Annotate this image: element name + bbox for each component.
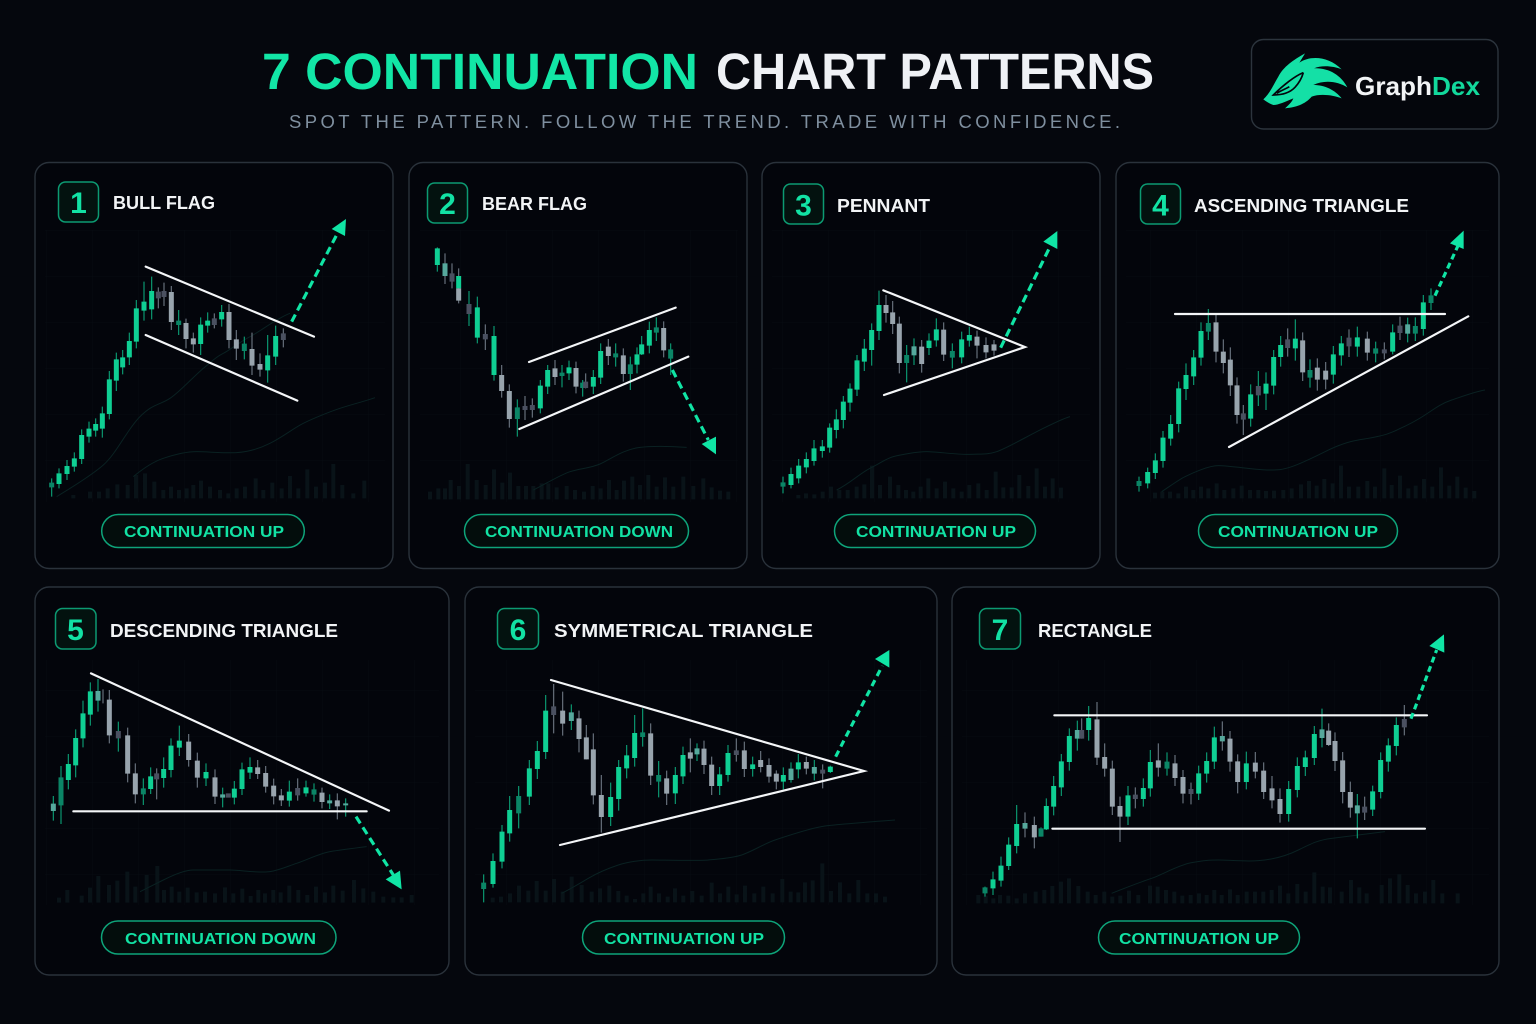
badge: 3 — [784, 184, 824, 224]
heading: bull flag: BULL FLAG — [113, 193, 215, 213]
chart: rectangle candles — [978, 634, 1458, 903]
heading: descending triangle: DESCENDING TRIANGLE — [110, 621, 338, 641]
arrow: up breakout — [1411, 634, 1444, 719]
pill: continuation up: CONTINUATION UP — [124, 524, 284, 541]
panel: 2 bear flag — [409, 162, 747, 568]
badge: 2 — [428, 183, 468, 223]
logo: GraphDex: Dex — [1432, 71, 1481, 101]
arrow: down breakout — [356, 817, 402, 889]
pill: continuation up: CONTINUATION UP — [856, 524, 1016, 541]
heading: symmetrical triangle: SYMMETRICAL TRIANGLE — [554, 621, 813, 641]
logo: GraphDex — [1252, 40, 1498, 129]
pill: continuation down: CONTINUATION DOWN — [125, 931, 316, 948]
panel: 5 descending triangle — [35, 587, 449, 975]
badge: 2: 2 — [439, 188, 456, 221]
heading: bear flag: BEAR FLAG — [482, 194, 587, 214]
pill: continuation up — [582, 921, 784, 954]
logo: GraphDex: Graph — [1355, 71, 1432, 101]
pill: continuation down — [102, 921, 336, 954]
badge: 1: 1 — [70, 187, 87, 220]
arrow: up breakout — [836, 650, 889, 757]
arrow: down breakout — [672, 370, 716, 454]
badge: 5: 5 — [67, 614, 84, 647]
pill: continuation up: CONTINUATION UP — [604, 931, 764, 948]
panel: 3 pennant — [762, 162, 1100, 568]
badge: 5 — [56, 608, 96, 649]
badge: 4 — [1140, 184, 1180, 224]
chart: symmetrical triangle candles — [484, 650, 895, 902]
subtitle: SPOT THE PATTERN. FOLLOW THE TREND. TRADE WITH CONFIDENCE. — [289, 111, 1120, 132]
pill: continuation up: CONTINUATION UP — [1218, 524, 1378, 541]
arrow: up breakout — [1001, 231, 1057, 348]
pill: continuation up — [834, 514, 1036, 548]
title — [262, 43, 1154, 100]
heading: ascending triangle: ASCENDING TRIANGLE — [1194, 196, 1409, 216]
title: 7 CONTINUATION — [262, 43, 698, 100]
icon: GraphDex flame head — [1263, 53, 1347, 108]
chart: descending triangle candles — [53, 673, 412, 903]
badge: 6: 6 — [510, 614, 526, 647]
badge: 3: 3 — [795, 190, 812, 222]
heading: rectangle: RECTANGLE — [1038, 621, 1152, 641]
badge: 7 — [980, 608, 1020, 649]
chart: ascending triangle candles — [1139, 231, 1485, 498]
panel: 4 ascending triangle — [1116, 162, 1499, 568]
panel: 6 symmetrical triangle — [465, 587, 937, 975]
pill: continuation up — [1098, 921, 1300, 954]
pill: continuation up: CONTINUATION UP — [1119, 931, 1279, 948]
chart: bull flag candles — [52, 219, 375, 498]
chart: bear flag candles — [430, 247, 728, 499]
badge: 6 — [498, 608, 538, 649]
arrow: up breakout — [292, 219, 346, 322]
pill: continuation up — [102, 514, 304, 548]
pill: continuation down: CONTINUATION DOWN — [485, 524, 673, 541]
arrow: up breakout — [1435, 231, 1464, 296]
badge: 4: 4 — [1152, 190, 1169, 222]
heading: pennant: PENNANT — [837, 196, 930, 216]
pill: continuation down — [464, 514, 688, 548]
title: CHART PATTERNS — [716, 43, 1154, 100]
panel: 7 rectangle — [952, 587, 1499, 975]
badge: 1 — [58, 182, 98, 222]
chart: pennant candles — [783, 231, 1070, 498]
pill: continuation up — [1198, 514, 1398, 548]
badge: 7: 7 — [992, 614, 1008, 647]
panel: 1 bull flag — [35, 162, 393, 568]
